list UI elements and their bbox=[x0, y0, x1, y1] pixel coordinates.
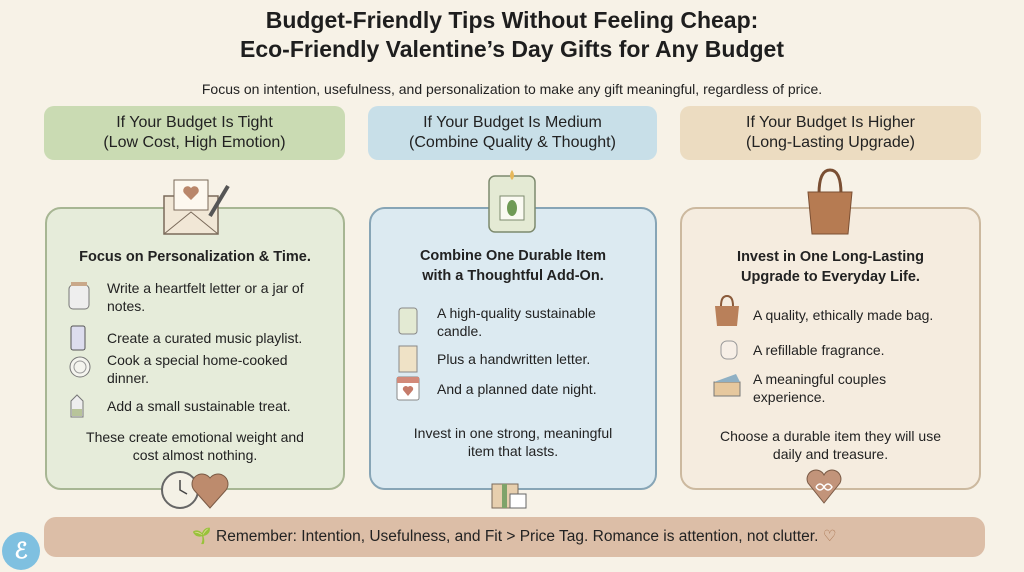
summary: Invest in one strong, meaningful bbox=[414, 425, 612, 441]
logo: ℰ bbox=[14, 538, 28, 563]
item: fragrance: A refillable fragrance. bbox=[753, 342, 885, 358]
item: letter bbox=[398, 346, 590, 372]
header: tight bbox=[44, 106, 345, 160]
panel heading bbox=[420, 248, 606, 284]
title bbox=[240, 7, 784, 62]
item: experience bbox=[714, 371, 886, 405]
icon: bag bbox=[807, 168, 853, 234]
panel heading: Invest in One Long-Lasting bbox=[737, 249, 924, 265]
summary: These create emotional weight and bbox=[86, 429, 304, 445]
header: higher: If Your Budget Is Higher bbox=[746, 114, 915, 131]
summary bbox=[720, 428, 941, 462]
logo bbox=[2, 532, 40, 570]
item: date: And a planned date night. bbox=[437, 381, 597, 397]
item: jar: Write a heartfelt letter or a jar of notes. bbox=[107, 280, 304, 314]
item: letter: Plus a handwritten letter. bbox=[437, 351, 590, 367]
panel heading bbox=[737, 249, 924, 285]
item: candle: A high-quality sustainable candle. bbox=[437, 305, 596, 339]
item: playlist: Create a curated music playlist. bbox=[107, 330, 302, 346]
icon: heart infinity bbox=[806, 470, 842, 504]
summary: item that lasts. bbox=[468, 443, 558, 459]
panel heading: Combine One Durable Item bbox=[420, 248, 606, 264]
header: medium bbox=[368, 106, 657, 160]
item: fragrance bbox=[720, 340, 885, 360]
item: experience: A meaningful couples bbox=[753, 371, 886, 387]
title: Budget-Friendly Tips Without Feeling Cheap: bbox=[266, 7, 758, 33]
panel: higher bbox=[680, 207, 981, 490]
header: tight: (Low Cost, High Emotion) bbox=[103, 134, 286, 151]
icon: clock and heart bbox=[161, 471, 228, 509]
panel heading: Upgrade to Everyday Life. bbox=[741, 269, 920, 285]
summary: cost almost nothing. bbox=[133, 447, 257, 463]
panel: tight bbox=[45, 207, 345, 490]
item: bag bbox=[715, 295, 933, 326]
header: medium: (Combine Quality & Thought) bbox=[409, 134, 616, 151]
icon: envelope with pen bbox=[163, 180, 230, 235]
item: playlist bbox=[70, 326, 302, 350]
icon: gift bbox=[492, 484, 526, 508]
panel heading: Focus on Personalization & Time. bbox=[79, 249, 311, 265]
item: treat: Add a small sustainable treat. bbox=[107, 398, 291, 414]
subtitle: Focus on intention, usefulness, and personalization to make any gift meaningful, regardless of price. bbox=[202, 81, 822, 97]
callout: remember bar bbox=[44, 517, 985, 557]
icon: candle bbox=[488, 170, 536, 233]
header: higher: (Long-Lasting Upgrade) bbox=[746, 134, 915, 151]
header: medium: If Your Budget Is Medium bbox=[423, 114, 602, 131]
item: date bbox=[396, 376, 597, 400]
summary bbox=[86, 429, 304, 463]
callout: remember bar: 🌱 Remember: Intention, Usefulness, and Fit > Price Tag. Romance is attention, not clutter. ♡ bbox=[192, 528, 837, 545]
panel: medium bbox=[369, 207, 657, 490]
item: experience: experience. bbox=[753, 389, 825, 405]
header: tight: If Your Budget Is Tight bbox=[116, 114, 273, 131]
panel heading: with a Thoughtful Add-On. bbox=[422, 268, 604, 284]
title: Eco-Friendly Valentine’s Day Gifts for Any Budget bbox=[240, 36, 784, 62]
item: treat bbox=[70, 394, 291, 418]
summary: Choose a durable item they will use bbox=[720, 428, 941, 444]
summary: daily and treasure. bbox=[773, 446, 888, 462]
item: dinner: Cook a special home-cooked dinner. bbox=[107, 352, 288, 386]
item: bag: A quality, ethically made bag. bbox=[753, 307, 933, 323]
summary bbox=[414, 425, 612, 459]
header: higher bbox=[680, 106, 981, 160]
